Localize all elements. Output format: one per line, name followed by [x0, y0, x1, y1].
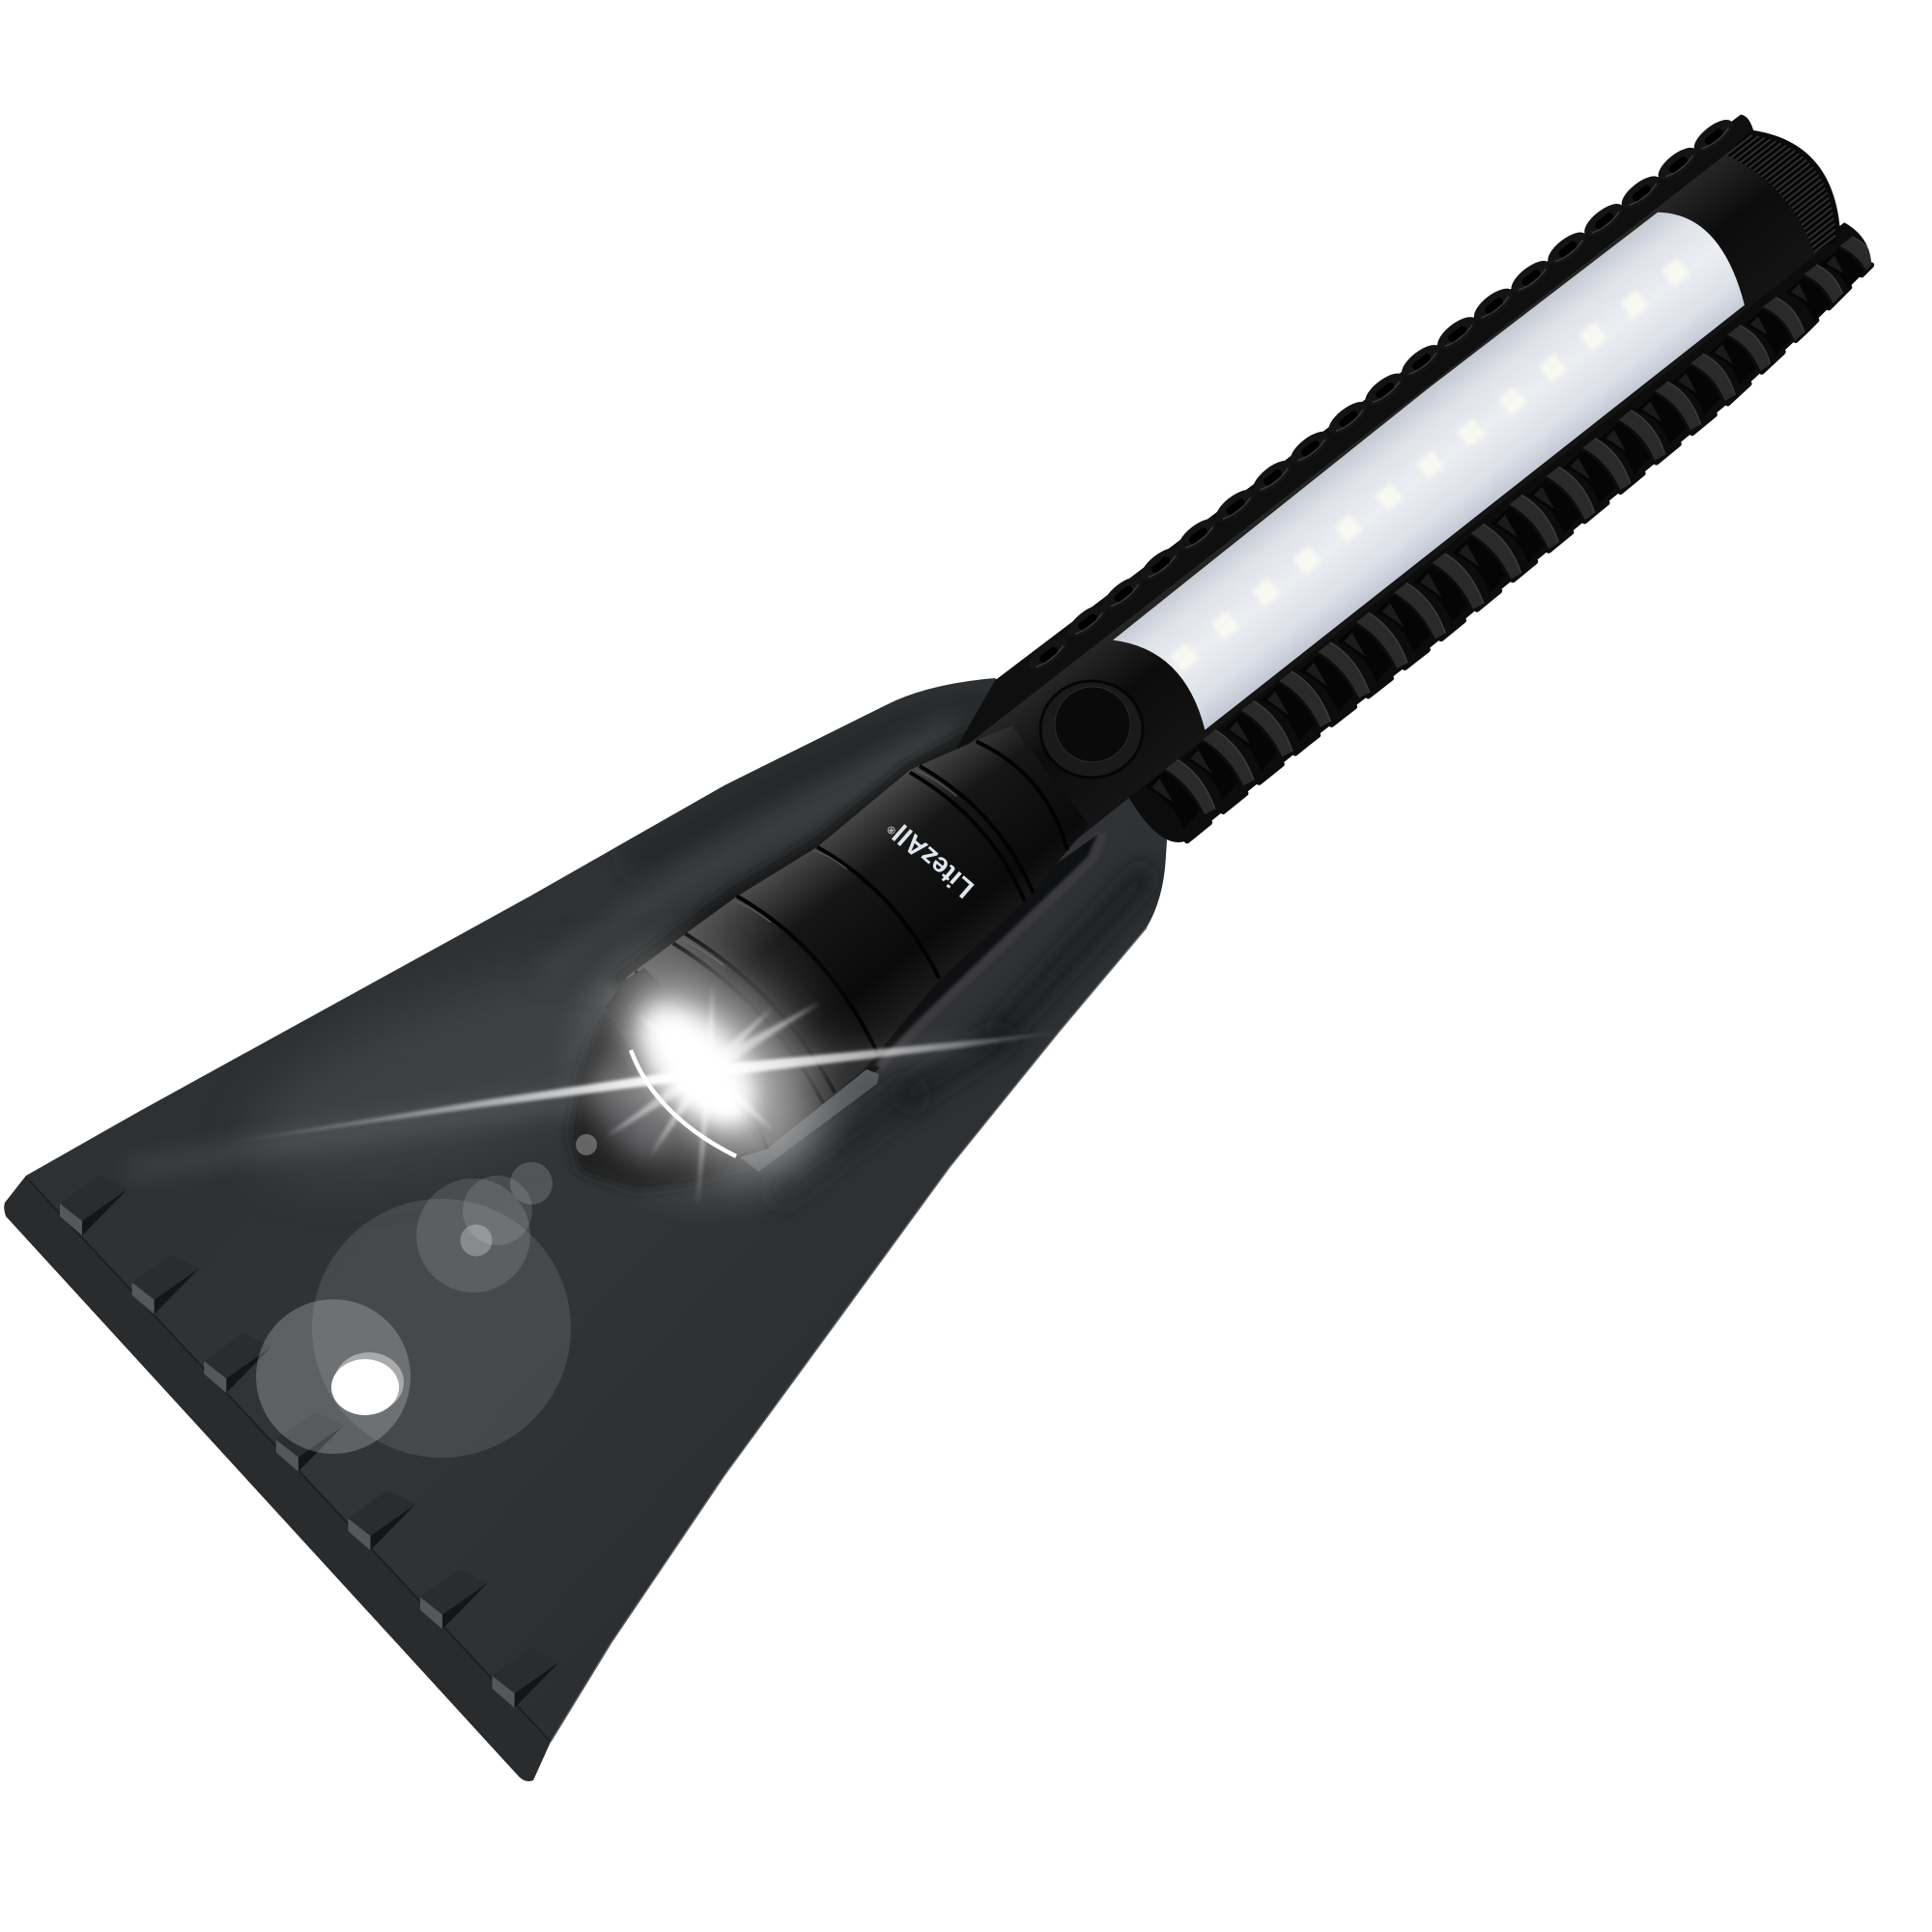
LED chips	[1169, 258, 1691, 671]
scraper blade	[4, 678, 1167, 1781]
gray haze over head	[581, 929, 849, 1206]
dark pit in front of lens	[570, 1008, 758, 1191]
lens flare circles	[256, 1134, 597, 1458]
ice teeth	[60, 1176, 560, 1708]
lit flashlight lens and glare	[126, 908, 1072, 1227]
lower channel shading	[804, 831, 1103, 1119]
knurled end cap	[1723, 113, 1859, 262]
star spikes	[606, 982, 821, 1208]
lit area of blade near the lens	[265, 975, 614, 1173]
long streak	[208, 1031, 1072, 1146]
lens rim arc	[631, 1050, 736, 1156]
flashlight head body	[597, 696, 1124, 1176]
soft streak	[126, 1038, 966, 1179]
upper blade shading	[618, 681, 995, 879]
handle tube	[966, 137, 1834, 858]
push button	[1040, 681, 1143, 778]
cradle plate and ridge under head	[741, 833, 1103, 1172]
light panel	[1110, 193, 1760, 741]
handle and flashlight	[592, 89, 1905, 1186]
hanging hole	[331, 1352, 404, 1415]
brand logo: LitezAll	[887, 818, 980, 904]
blade edge strip	[5, 1176, 551, 1780]
lens housing	[606, 968, 760, 1156]
halo	[549, 908, 867, 1227]
head groove lines	[632, 707, 1110, 1149]
lower grip rail	[1119, 219, 1900, 854]
blade right edge highlight	[551, 927, 1147, 1742]
brand logo: ®	[885, 823, 898, 837]
glow core	[617, 982, 778, 1149]
upper grip rail	[930, 103, 1763, 765]
